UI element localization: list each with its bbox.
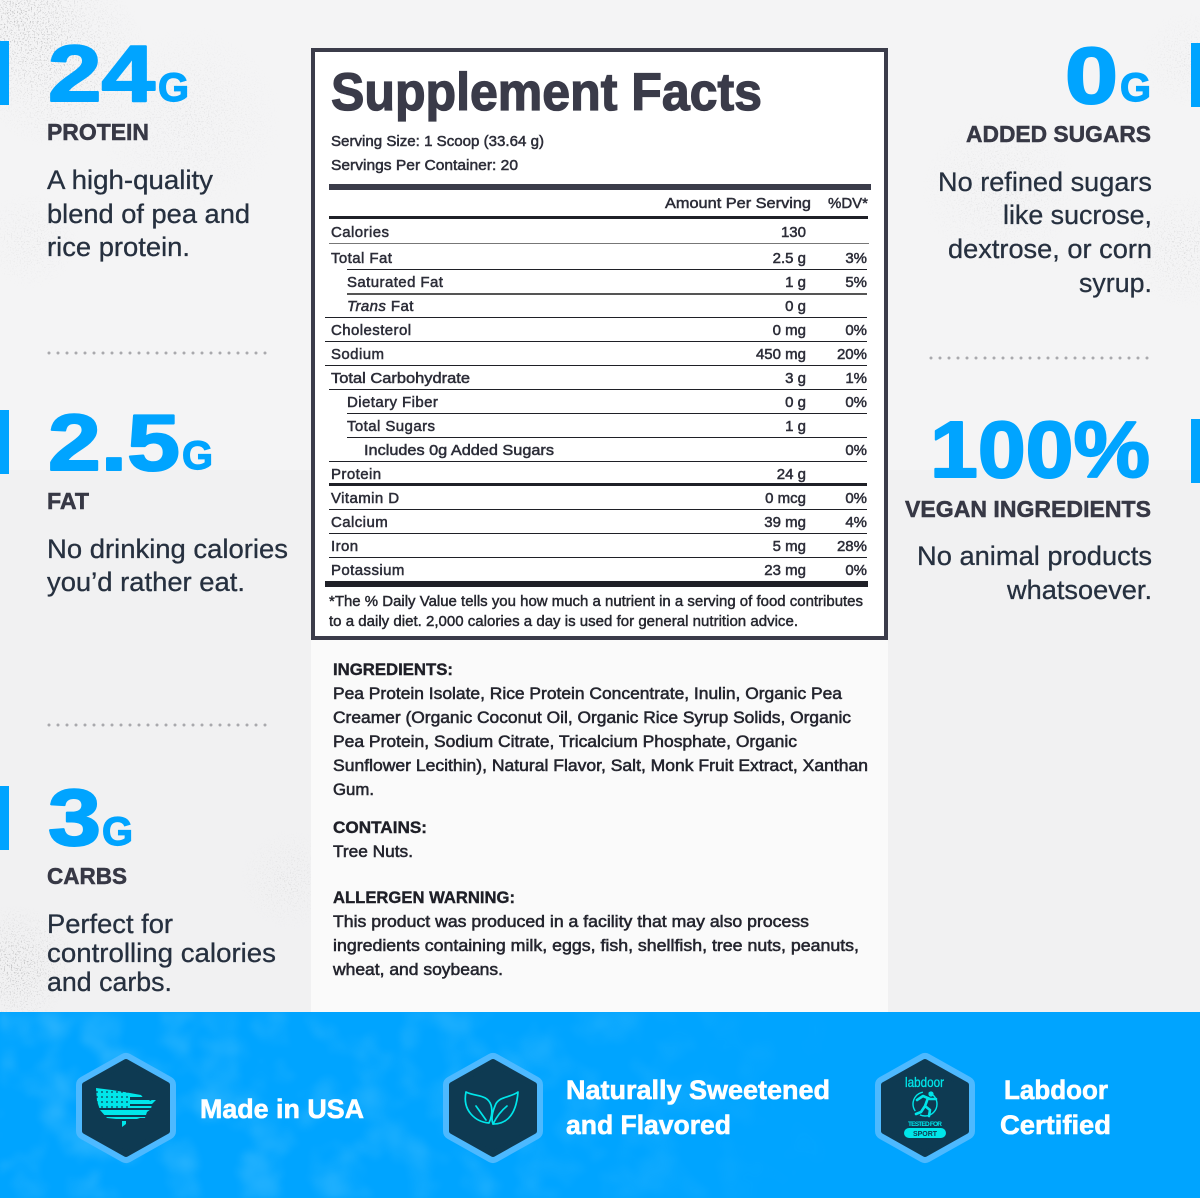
description [47,534,288,597]
big number: 24 [48,29,156,118]
contains block: CONTAINS: [333,818,427,837]
panel: ingredients backdrop [311,640,888,1012]
nutrition table rows: 5 mg [773,538,806,555]
nutrition table rows: 23 mg [764,562,806,579]
label [1000,1075,1111,1140]
ingredients block: Pea Protein Isolate, Rice Protein Concentrate, Inulin, Organic Pea [333,684,843,703]
big number: 3 [48,773,101,862]
description: you’d rather eat. [47,567,245,597]
column headers [665,195,868,212]
nutrition table rows: Cholesterol [331,322,412,339]
heading: Supplement Facts [331,63,762,122]
icon: labdoor tested for sport: TESTED FOR [908,1121,942,1128]
nutrition table rows: 0 g [785,298,806,315]
nutrition table rows: 0% [845,322,867,339]
description: No animal products [917,541,1152,571]
stat: 100% vegan ingredients [905,405,1200,605]
icon: USA flag map [96,1088,156,1127]
serving information: Servings Per Container: 20 [331,157,518,174]
description [917,541,1152,605]
nutrition table rows: 39 mg [764,514,806,531]
serving information [331,133,544,174]
ingredients block: Gum. [333,780,374,799]
big number: 100% [930,405,1150,494]
nutrition table rows: 3 g [785,370,806,387]
nutrition table rows: 0% [845,394,867,411]
nutrition table rows: 450 mg [756,346,806,363]
description: Perfect for [47,909,173,939]
icon: leaves [465,1092,518,1124]
nutrition table rows: Protein [331,466,381,483]
label: Made in USA [200,1094,364,1124]
hexagon [884,1062,966,1154]
badge: labdoor certified [884,1062,1111,1154]
nutrition table rows: Calcium [331,514,388,531]
stat label: CARBS [47,863,127,889]
allergen warning block: ALLERGEN WARNING: [333,888,515,907]
hexagon [85,1062,167,1154]
description: controlling calories [47,938,276,968]
nutrition table rows [331,224,867,579]
nutrition table rows: Total Sugars [347,418,435,435]
big number: 0 [1065,31,1118,120]
nutrition table rows: 1 g [785,418,806,435]
unit: G [158,66,189,110]
nutrition table rows: 2.5 g [773,250,806,267]
stat label: FAT [47,488,89,514]
panel: supplement facts label [313,50,886,638]
hexagon [452,1062,534,1154]
nutrition table rows: Saturated Fat [347,274,444,291]
badge: made in USA [85,1062,364,1154]
description: rice protein. [47,232,190,262]
nutrition table rows: Calories [331,224,389,241]
description: dextrose, or corn [948,234,1152,264]
icon: labdoor tested for sport: labdoor [905,1074,944,1090]
ingredients block: Sunflower Lecithin), Natural Flavor, Salt, Monk Fruit Extract, Xanthan [333,756,868,775]
allergen warning block: wheat, and soybeans. [332,960,503,979]
label: and Flavored [566,1110,731,1140]
icon: labdoor tested for sport: SPORT [913,1131,938,1138]
nutrition table rows: 0% [845,490,867,507]
nutrition table rows: Includes 0g Added Sugars [364,442,554,459]
nutrition table rows: 0 g [785,394,806,411]
description: whatsoever. [1006,575,1152,605]
nutrition table rows: 1 g [785,274,806,291]
nutrition table rows: 20% [837,346,867,363]
contains block [333,818,427,861]
label: Certified [1000,1110,1111,1140]
description: No refined sugars [938,167,1152,197]
nutrition table rows: 0% [845,442,867,459]
contains block: Tree Nuts. [333,842,413,861]
nutrition table rows: Total Fat [331,250,393,267]
badge: naturally sweetened [452,1062,830,1154]
blue footer band [0,1012,1200,1200]
description [47,165,250,262]
big number: 2.5 [48,398,180,487]
stat label: VEGAN INGREDIENTS [905,496,1151,522]
accent bar [1191,419,1200,483]
accent bar [0,786,9,850]
description: syrup. [1079,268,1152,298]
stat: 0g added sugars [938,31,1200,298]
stat: 3g carbs [0,773,276,997]
description: No drinking calories [47,534,288,564]
description [938,167,1152,298]
stat label: ADDED SUGARS [966,121,1151,147]
nutrition table rows: 1% [845,370,867,387]
label [566,1075,830,1140]
column headers: %DV* [828,195,868,212]
nutrition table rows: Dietary Fiber [347,394,438,411]
stat: 24g protein [0,29,250,262]
nutrition table rows: Vitamin D [331,490,400,507]
nutrition table rows: 0 mg [773,322,806,339]
allergen warning block: ingredients containing milk, eggs, fish, shellfish, tree nuts, peanuts, [333,936,859,955]
footnote: *The % Daily Value tells you how much a nutrient in a serving of food contributes [329,593,863,610]
nutrition table rows: 4% [845,514,867,531]
accent bar [0,410,9,474]
stat label: PROTEIN [47,119,149,145]
footnote [329,593,863,630]
stat: 2.5g fat [0,398,288,597]
footnote: to a daily diet. 2,000 calories a day is used for general nutrition advice. [329,613,798,630]
nutrition table rows: 0% [845,562,867,579]
column headers: Amount Per Serving [665,195,811,212]
allergen warning block: This product was produced in a facility that may also process [333,912,809,931]
icon: labdoor tested for sport [904,1074,946,1138]
unit: G [102,810,133,854]
allergen warning block [332,888,859,979]
nutrition table rows: Sodium [331,346,384,363]
description [47,909,276,997]
nutrition table rows: 0 mcg [765,490,806,507]
description: and carbs. [47,967,172,997]
nutrition table rows: Potassium [331,562,405,579]
ingredients block: INGREDIENTS: [333,660,453,679]
label: Naturally Sweetened [566,1075,830,1105]
accent bar [0,41,9,105]
nutrition table rows: 130 [781,224,806,241]
ingredients block: Creamer (Organic Coconut Oil, Organic Rice Syrup Solids, Organic [333,708,852,727]
ingredients block [333,660,868,799]
nutrition table rows: Iron [331,538,359,555]
nutrition table rows: Trans Fat [347,298,414,315]
description: blend of pea and [47,199,250,229]
nutrition table rows: 3% [845,250,867,267]
nutrition table rows: 28% [837,538,867,555]
unit: G [1120,66,1151,110]
description: A high-quality [47,165,214,195]
label: Labdoor [1004,1075,1108,1105]
serving information: Serving Size: 1 Scoop (33.64 g) [331,133,544,150]
unit: G [182,434,213,478]
description: like sucrose, [1003,200,1152,230]
ingredients block: Pea Protein, Sodium Citrate, Tricalcium Phosphate, Organic [333,732,798,751]
nutrition table rows: 5% [845,274,867,291]
nutrition table rows: Total Carbohydrate [331,370,470,387]
nutrition table rows: 24 g [777,466,806,483]
accent bar [1191,43,1200,107]
